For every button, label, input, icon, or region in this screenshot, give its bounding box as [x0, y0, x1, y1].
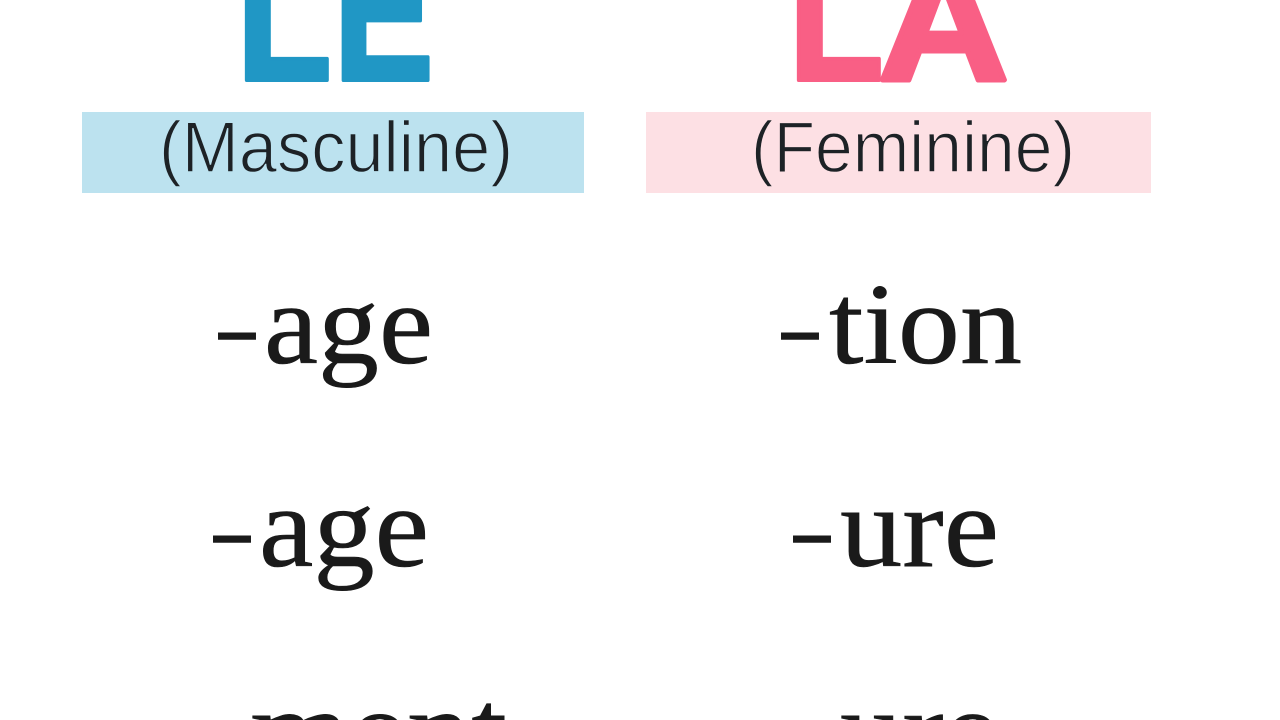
suffix: -ure (row 2, feminine): – — [793, 464, 831, 592]
suffix: -age (row 2, masculine): age — [259, 464, 429, 592]
heading: LE — [236, 0, 434, 124]
label: masculine band — [82, 108, 584, 193]
label: feminine band — [646, 108, 1151, 193]
suffix: -age (row 1, masculine): – — [218, 261, 256, 389]
suffix: -age (row 2, masculine): – — [213, 464, 251, 592]
label: feminine band: (Feminine) — [751, 108, 1075, 188]
suffix: -ure (row 2, feminine): ure — [840, 464, 999, 592]
suffix: -age (row 1, masculine): age — [264, 261, 433, 389]
label: masculine band: (Masculine) — [159, 108, 513, 188]
suffix: -tion (row 1, feminine): – — [781, 261, 819, 389]
heading: LA — [788, 0, 1009, 121]
suffix: -tion (row 1, feminine): tion — [829, 261, 1022, 389]
